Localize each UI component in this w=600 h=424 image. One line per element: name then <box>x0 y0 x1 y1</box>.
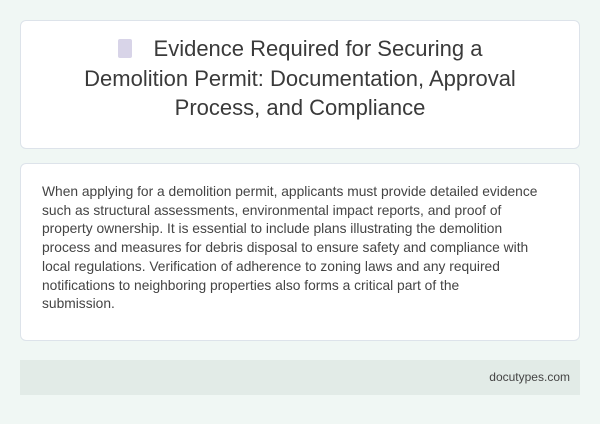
title card <box>20 20 580 149</box>
title: Evidence Required for Securing a Demolition Permit: Documentation, Approval Process, and Compliance <box>84 36 516 120</box>
description text: local regulations. Verification of adherence to zoning laws and any required <box>42 259 500 274</box>
description text: submission. <box>42 296 115 311</box>
description text <box>42 184 537 311</box>
footer bar <box>20 360 580 395</box>
footer source: docutypes.com <box>489 370 570 384</box>
description text: such as structural assessments, environmental impact reports, and proof of <box>42 203 501 218</box>
description text: When applying for a demolition permit, applicants must provide detailed evidence <box>42 184 537 199</box>
description panel <box>20 163 580 341</box>
description text: property ownership. It is essential to include plans illustrating the demolition <box>42 221 502 236</box>
icon: document <box>118 39 132 58</box>
description text: notifications to neighboring properties also forms a critical part of the <box>42 278 459 293</box>
description text: process and measures for debris disposal to ensure safety and compliance with <box>42 240 528 255</box>
